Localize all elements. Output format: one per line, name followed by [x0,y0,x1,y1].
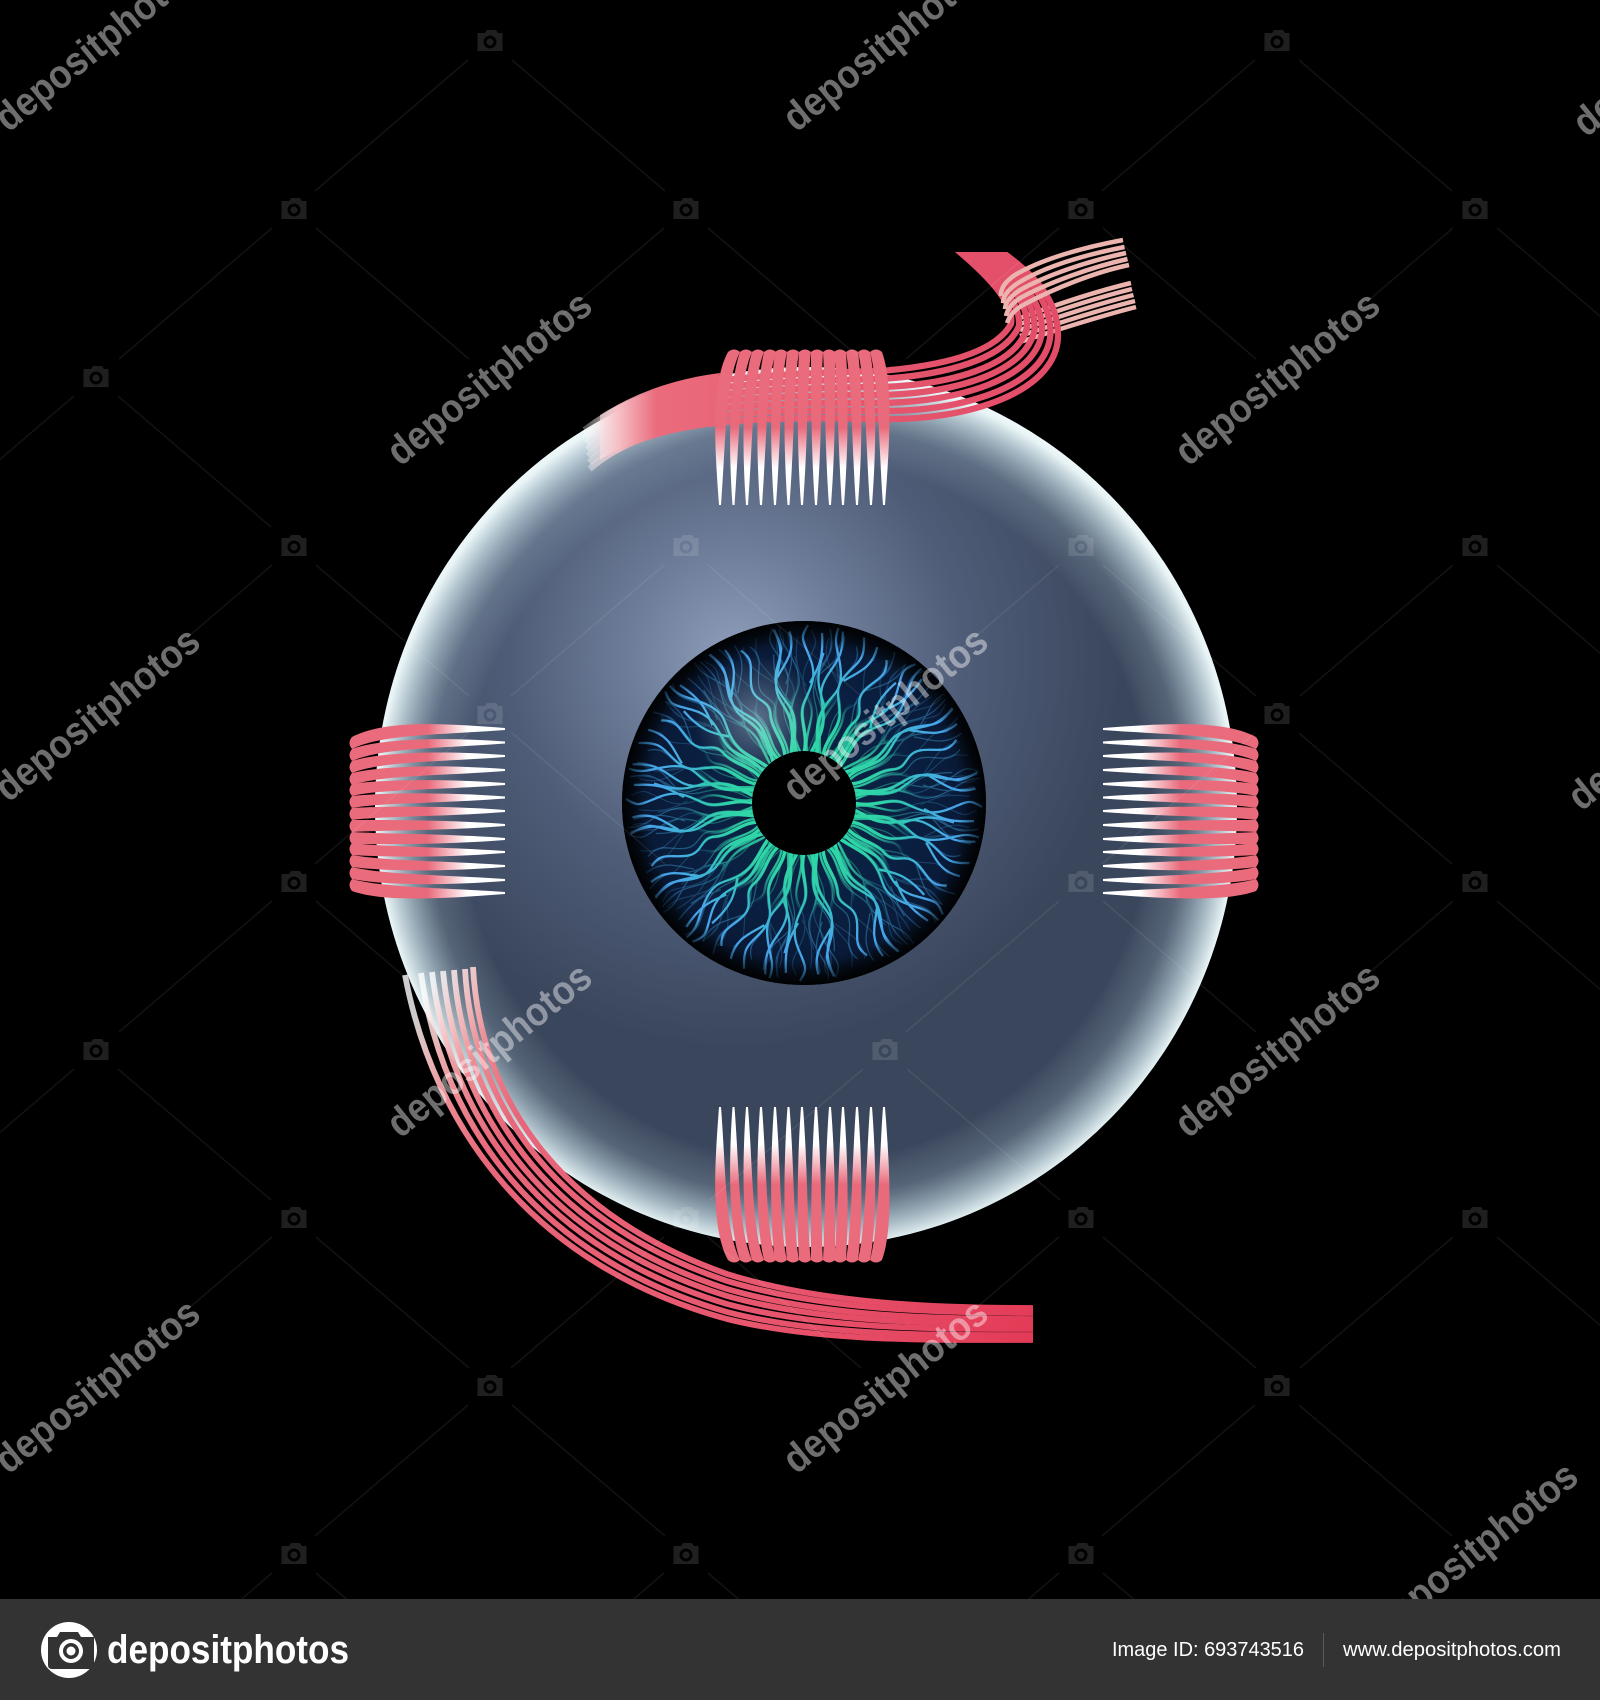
depositphotos diagonal watermarks: depositphotos [1166,282,1388,474]
trochlea strap: lower strands [1020,283,1136,342]
superior rectus muscle [715,350,890,505]
trochlea strap: upper strands [1001,240,1129,323]
inferior rectus muscle [715,1107,890,1262]
depositphotos diagonal watermarks: depositphotos [774,618,996,810]
depositphotos diagonal watermarks: depositphotos [1364,1453,1586,1645]
image id: Image ID: 693743516 [1112,1639,1304,1661]
website url: www.depositphotos.com [1342,1639,1561,1661]
medial rectus muscle (left) [350,724,505,898]
footer logo: depositphotos [107,1628,349,1672]
footer logo [41,1622,349,1678]
superior oblique muscle band [584,245,1058,469]
footer bar [0,1599,1600,1700]
lateral rectus muscle (right) [1103,724,1258,898]
depositphotos diagonal watermarks: depositphotos [1166,954,1388,1146]
iris and pupil [553,552,1055,1054]
inferior oblique muscle band [405,967,1033,1340]
depositphotos diagonal watermarks: depositphotos [378,954,600,1146]
eyeball [375,367,1237,1247]
depositphotos diagonal watermarks: depositphotos [378,282,600,474]
depositphotos diagonal watermarks: depositphotos [774,1290,996,1482]
